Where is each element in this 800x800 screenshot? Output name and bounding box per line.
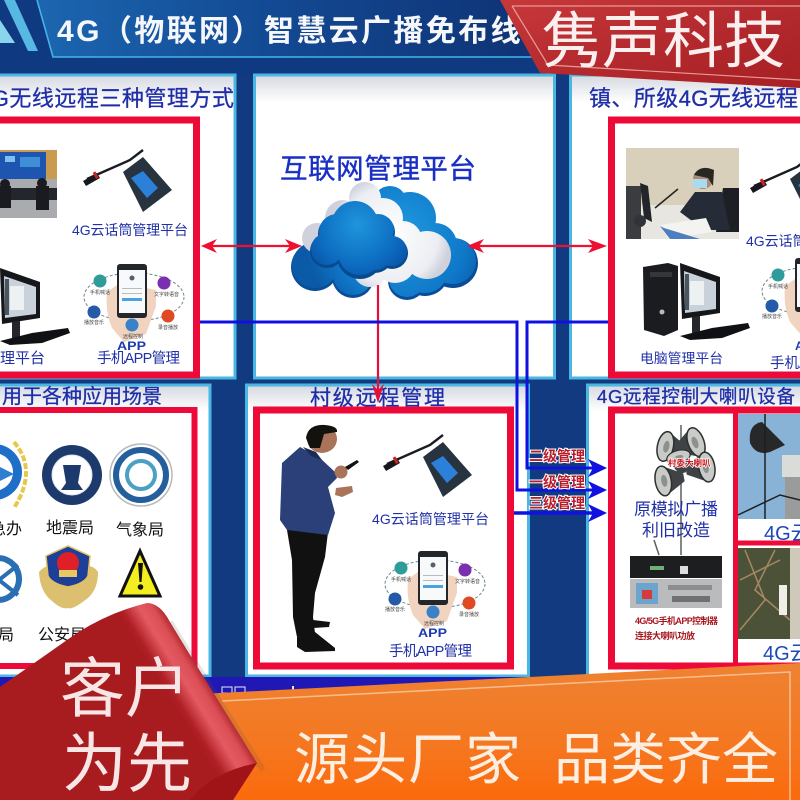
icon: phone app: 播放音乐	[762, 313, 782, 320]
label: 4G/5G手机APP控制器	[635, 615, 718, 626]
icon: phone app: 录音播放	[459, 611, 479, 618]
label: 原模拟广播	[634, 500, 718, 519]
heading: 用于各种应用场景	[2, 385, 162, 408]
label: 地震局	[46, 519, 94, 537]
badge: earthquake administration	[42, 445, 102, 505]
label: 手机APP管理	[389, 643, 472, 660]
footer strip	[0, 677, 560, 697]
icon: computer tower and monitor	[643, 263, 750, 340]
label: 连接大喇叭功放	[635, 630, 695, 641]
figure: man using phone	[280, 425, 359, 652]
arrow: red double arrow right	[467, 239, 607, 253]
icon: phone app: 播放音乐	[84, 319, 104, 326]
icon: microphone device	[750, 157, 800, 219]
arrow: level three management line	[514, 504, 607, 522]
label: 电脑管理平台	[640, 351, 723, 366]
heading: 互联网管理平台	[280, 153, 476, 184]
text: complete range: 品类齐全	[554, 728, 778, 791]
photo: pole mounted speaker	[738, 414, 800, 519]
title: 4G（物联网）智慧云广播免布线	[57, 15, 523, 48]
label: 4G云话筒管理平台	[72, 222, 188, 238]
icon: microphone device	[383, 435, 472, 497]
text: brand name: 隽声科技	[541, 7, 785, 75]
icon: phone app: 手机喊话	[768, 283, 788, 290]
arrow: level one management line	[200, 322, 607, 499]
icon: computer	[0, 268, 70, 345]
ribbon: red brand banner	[500, 0, 800, 88]
panel: internet management platform	[254, 75, 554, 378]
arrow: red down arrow	[372, 285, 384, 403]
arrow: level two management line	[527, 322, 608, 477]
icon: phone app: 远程控制	[123, 333, 143, 340]
label: APP: APP	[117, 339, 146, 353]
red frame	[0, 410, 194, 666]
icon: control rack	[630, 556, 722, 608]
red frame	[0, 120, 196, 375]
panel: top-left three management modes	[0, 75, 235, 378]
label: 手机APP管理	[97, 350, 180, 367]
arrow: red double arrow left	[201, 239, 302, 253]
badge: police	[39, 546, 98, 608]
icon: phone app: 手机喊话	[90, 289, 110, 296]
text: customer first line two: 为先	[62, 727, 192, 800]
icon: phone app: 录音播放	[158, 324, 178, 331]
icon: phone app: 手机喊话	[391, 576, 411, 583]
icon: phone app	[84, 264, 184, 342]
icon: warning triangle	[120, 551, 160, 596]
photo: control room	[0, 150, 57, 218]
icon: phone app: 文字转语音	[455, 578, 480, 585]
label: level three: 三级管理	[529, 495, 585, 511]
text: source factory: 源头厂家	[294, 728, 522, 791]
badge: emergency office	[0, 442, 26, 508]
ribbon: red page curl	[0, 603, 263, 800]
icon: horn speakers	[653, 425, 717, 555]
icon: logo chevrons	[0, 0, 38, 51]
heading: 镇、所级4G无线远程	[589, 86, 798, 111]
icon: phone app	[385, 551, 485, 629]
label: 利旧改造	[642, 521, 710, 540]
panel: village level management	[246, 385, 528, 676]
red frame	[612, 410, 800, 666]
panel: town level management	[570, 75, 800, 378]
label: level two: 二级管理	[529, 448, 585, 464]
icon: phone app: 文字转语音	[154, 291, 179, 298]
badge: blue wheel	[0, 558, 19, 600]
heading: 村级远程管理	[310, 387, 445, 410]
label: 公安局	[38, 626, 86, 644]
photo: official at desk	[626, 148, 739, 239]
icon: microphone device	[83, 150, 172, 212]
panel: application scenarios	[0, 385, 210, 676]
panel: 4G loudspeaker devices	[588, 385, 800, 676]
label: level one: 一级管理	[529, 474, 585, 490]
icon: phone app: 远程控制	[424, 620, 444, 627]
red frame	[256, 410, 510, 666]
icon: phone app	[762, 258, 800, 336]
label: APP: APP	[418, 626, 447, 640]
header bar	[0, 0, 540, 75]
label: 4G云话筒管理平台	[372, 511, 489, 527]
label: 村委大喇叭	[668, 458, 711, 468]
text: customer first line one: 客户	[60, 652, 190, 725]
ribbon: orange source factory banner	[200, 663, 800, 800]
icon: phone app: 播放音乐	[385, 606, 405, 613]
divider frame	[735, 410, 800, 666]
label: 气象局	[116, 521, 164, 539]
red frame	[612, 120, 800, 375]
heading: 4G远程控制大喇叭设备	[597, 386, 795, 407]
badge: meteorological administration	[110, 444, 172, 506]
photo: trees and antenna box	[738, 548, 800, 639]
icon: cloud	[291, 182, 478, 300]
